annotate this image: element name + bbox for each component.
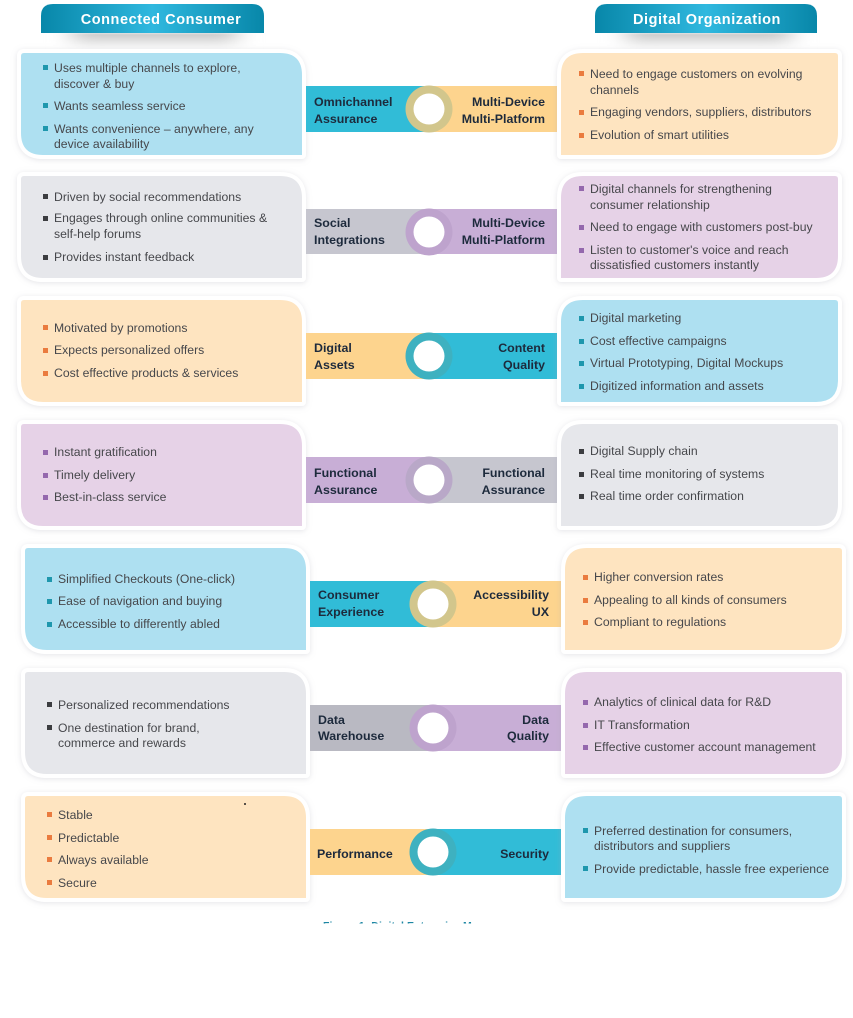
- row 2 left panel: Engages through online communities &: [54, 211, 267, 225]
- row 1 left panel: Uses multiple channels to explore,: [54, 61, 241, 75]
- row 1 connector: Multi-Platform: [462, 112, 545, 126]
- row 5 connector: Accessibility: [473, 588, 549, 602]
- row 6 connector: Warehouse: [318, 729, 384, 743]
- row 1 left panel: [21, 53, 302, 155]
- row 1 left panel: discover & buy: [54, 77, 135, 91]
- row 4 connector: [306, 456, 557, 504]
- row 5 right panel: [565, 548, 842, 650]
- row 7 left panel: Stable: [58, 808, 93, 822]
- row 7 right panel: distributors and suppliers: [594, 839, 730, 853]
- row 5 connector: [310, 580, 561, 628]
- row 5 left panel: [25, 548, 306, 650]
- header: Connected Consumer: [41, 4, 264, 50]
- row 4 left panel: Instant gratification: [54, 445, 157, 459]
- row 2 right panel: consumer relationship: [590, 198, 710, 212]
- row 4 left panel: Best-in-class service: [54, 490, 167, 504]
- row 1 connector: Omnichannel: [314, 95, 392, 109]
- row 1 connector: [306, 86, 557, 132]
- row 2 right panel: [561, 176, 838, 278]
- row 3 right panel: Digitized information and assets: [590, 379, 764, 393]
- row 3 connector: Quality: [503, 358, 545, 372]
- row 4 connector: Functional: [482, 466, 545, 480]
- row 5 left panel: Accessible to differently abled: [58, 617, 220, 631]
- row 5 left panel: Simplified Checkouts (One-click): [58, 572, 235, 586]
- row 5 connector: Experience: [318, 605, 384, 619]
- row 7 left panel: Predictable: [58, 831, 119, 845]
- row 1 connector: Multi-Device: [472, 95, 545, 109]
- row 3 right panel: Cost effective campaigns: [590, 334, 727, 348]
- row 7 left panel: Secure: [58, 876, 97, 890]
- row 3 left panel: Motivated by promotions: [54, 321, 187, 335]
- row 6 left panel: [25, 672, 306, 774]
- row 2 right panel: Digital channels for strengthening: [590, 182, 772, 196]
- row 4 right panel: Digital Supply chain: [590, 444, 698, 458]
- row 2 left panel: [21, 176, 302, 278]
- row 3 connector: Content: [498, 341, 545, 355]
- row 4 right panel: Real time monitoring of systems: [590, 467, 764, 481]
- row 1 left panel: Wants convenience – anywhere, any: [54, 122, 255, 136]
- header: Digital Organization: [595, 4, 817, 50]
- row 4 right panel: Real time order confirmation: [590, 489, 744, 503]
- row 5 right panel: Compliant to regulations: [594, 615, 726, 629]
- row 2 left panel: self-help forums: [54, 227, 141, 241]
- row 3 right panel: Digital marketing: [590, 311, 681, 325]
- header: Digital Organization: Digital Organization: [633, 12, 781, 28]
- row 7 connector: Performance: [317, 847, 393, 861]
- row 4 connector: Functional: [314, 466, 377, 480]
- row 2 right panel: Need to engage with customers post-buy: [590, 220, 814, 234]
- row 7 right panel: Provide predictable, hassle free experience: [594, 862, 829, 876]
- row 5 right panel: Appealing to all kinds of consumers: [594, 593, 787, 607]
- row 3 connector: [306, 332, 557, 380]
- row 2 connector: Multi-Platform: [462, 233, 545, 247]
- row 1 right panel: Evolution of smart utilities: [590, 128, 729, 142]
- row 3 right panel: Virtual Prototyping, Digital Mockups: [590, 356, 783, 370]
- row 7 left panel: Always available: [58, 853, 149, 867]
- row 4 connector: Assurance: [482, 483, 545, 497]
- row 7 connector: Security: [500, 847, 549, 861]
- row 1 right panel: [561, 53, 838, 155]
- row 3 left panel: [21, 300, 302, 402]
- row 3 right panel: [561, 300, 838, 402]
- row 6 connector: Data: [522, 713, 549, 727]
- row 2 right panel: Listen to customer's voice and reach: [590, 243, 789, 257]
- row 7 right panel: Preferred destination for consumers,: [594, 824, 792, 838]
- row 5 connector: Consumer: [318, 588, 379, 602]
- row 5 right panel: Higher conversion rates: [594, 570, 723, 584]
- row 6 right panel: Analytics of clinical data for R&D: [594, 695, 771, 709]
- row 6 right panel: IT Transformation: [594, 718, 690, 732]
- row 5 connector: UX: [532, 605, 550, 619]
- row 4 connector: Assurance: [314, 483, 377, 497]
- row 7 left panel: [25, 796, 306, 898]
- row 2 connector: [306, 208, 557, 256]
- row 6 connector: Quality: [507, 729, 549, 743]
- row 7 right panel: [565, 796, 842, 898]
- clipped caption: Figure 1: Digital Enterprise Map: [323, 920, 484, 932]
- header: Connected Consumer: Connected Consumer: [81, 12, 241, 28]
- row 7 connector: [310, 828, 561, 876]
- row 3 connector: Assets: [314, 358, 355, 372]
- row 6 left panel: One destination for brand,: [58, 721, 200, 735]
- row 2 left panel: Provides instant feedback: [54, 250, 195, 264]
- row 1 connector: Assurance: [314, 112, 377, 126]
- row 2 left panel: Driven by social recommendations: [54, 190, 241, 204]
- row 2 connector: Social: [314, 216, 351, 230]
- row 6 right panel: Effective customer account management: [594, 740, 816, 754]
- row 3 left panel: Expects personalized offers: [54, 343, 204, 357]
- row 4 right panel: [561, 424, 838, 526]
- row 1 right panel: Engaging vendors, suppliers, distributors: [590, 105, 811, 119]
- row 6 right panel: [565, 672, 842, 774]
- row 1 right panel: Need to engage customers on evolving: [590, 67, 802, 81]
- row 2 connector: Integrations: [314, 233, 385, 247]
- row 1 left panel: device availability: [54, 137, 150, 151]
- row 1 right panel: channels: [590, 83, 639, 97]
- row 6 connector: [310, 704, 561, 752]
- row 2 right panel: dissatisfied customers instantly: [590, 258, 760, 272]
- row 3 connector: Digital: [314, 341, 352, 355]
- row 5 left panel: Ease of navigation and buying: [58, 594, 222, 608]
- row 2 connector: Multi-Device: [472, 216, 545, 230]
- row 6 connector: Data: [318, 713, 345, 727]
- row 1 left panel: Wants seamless service: [54, 99, 186, 113]
- row 6 left panel: commerce and rewards: [58, 736, 186, 750]
- row 4 left panel: [21, 424, 302, 526]
- row 4 left panel: Timely delivery: [54, 468, 136, 482]
- row 6 left panel: Personalized recommendations: [58, 698, 230, 712]
- row 3 left panel: Cost effective products & services: [54, 366, 238, 380]
